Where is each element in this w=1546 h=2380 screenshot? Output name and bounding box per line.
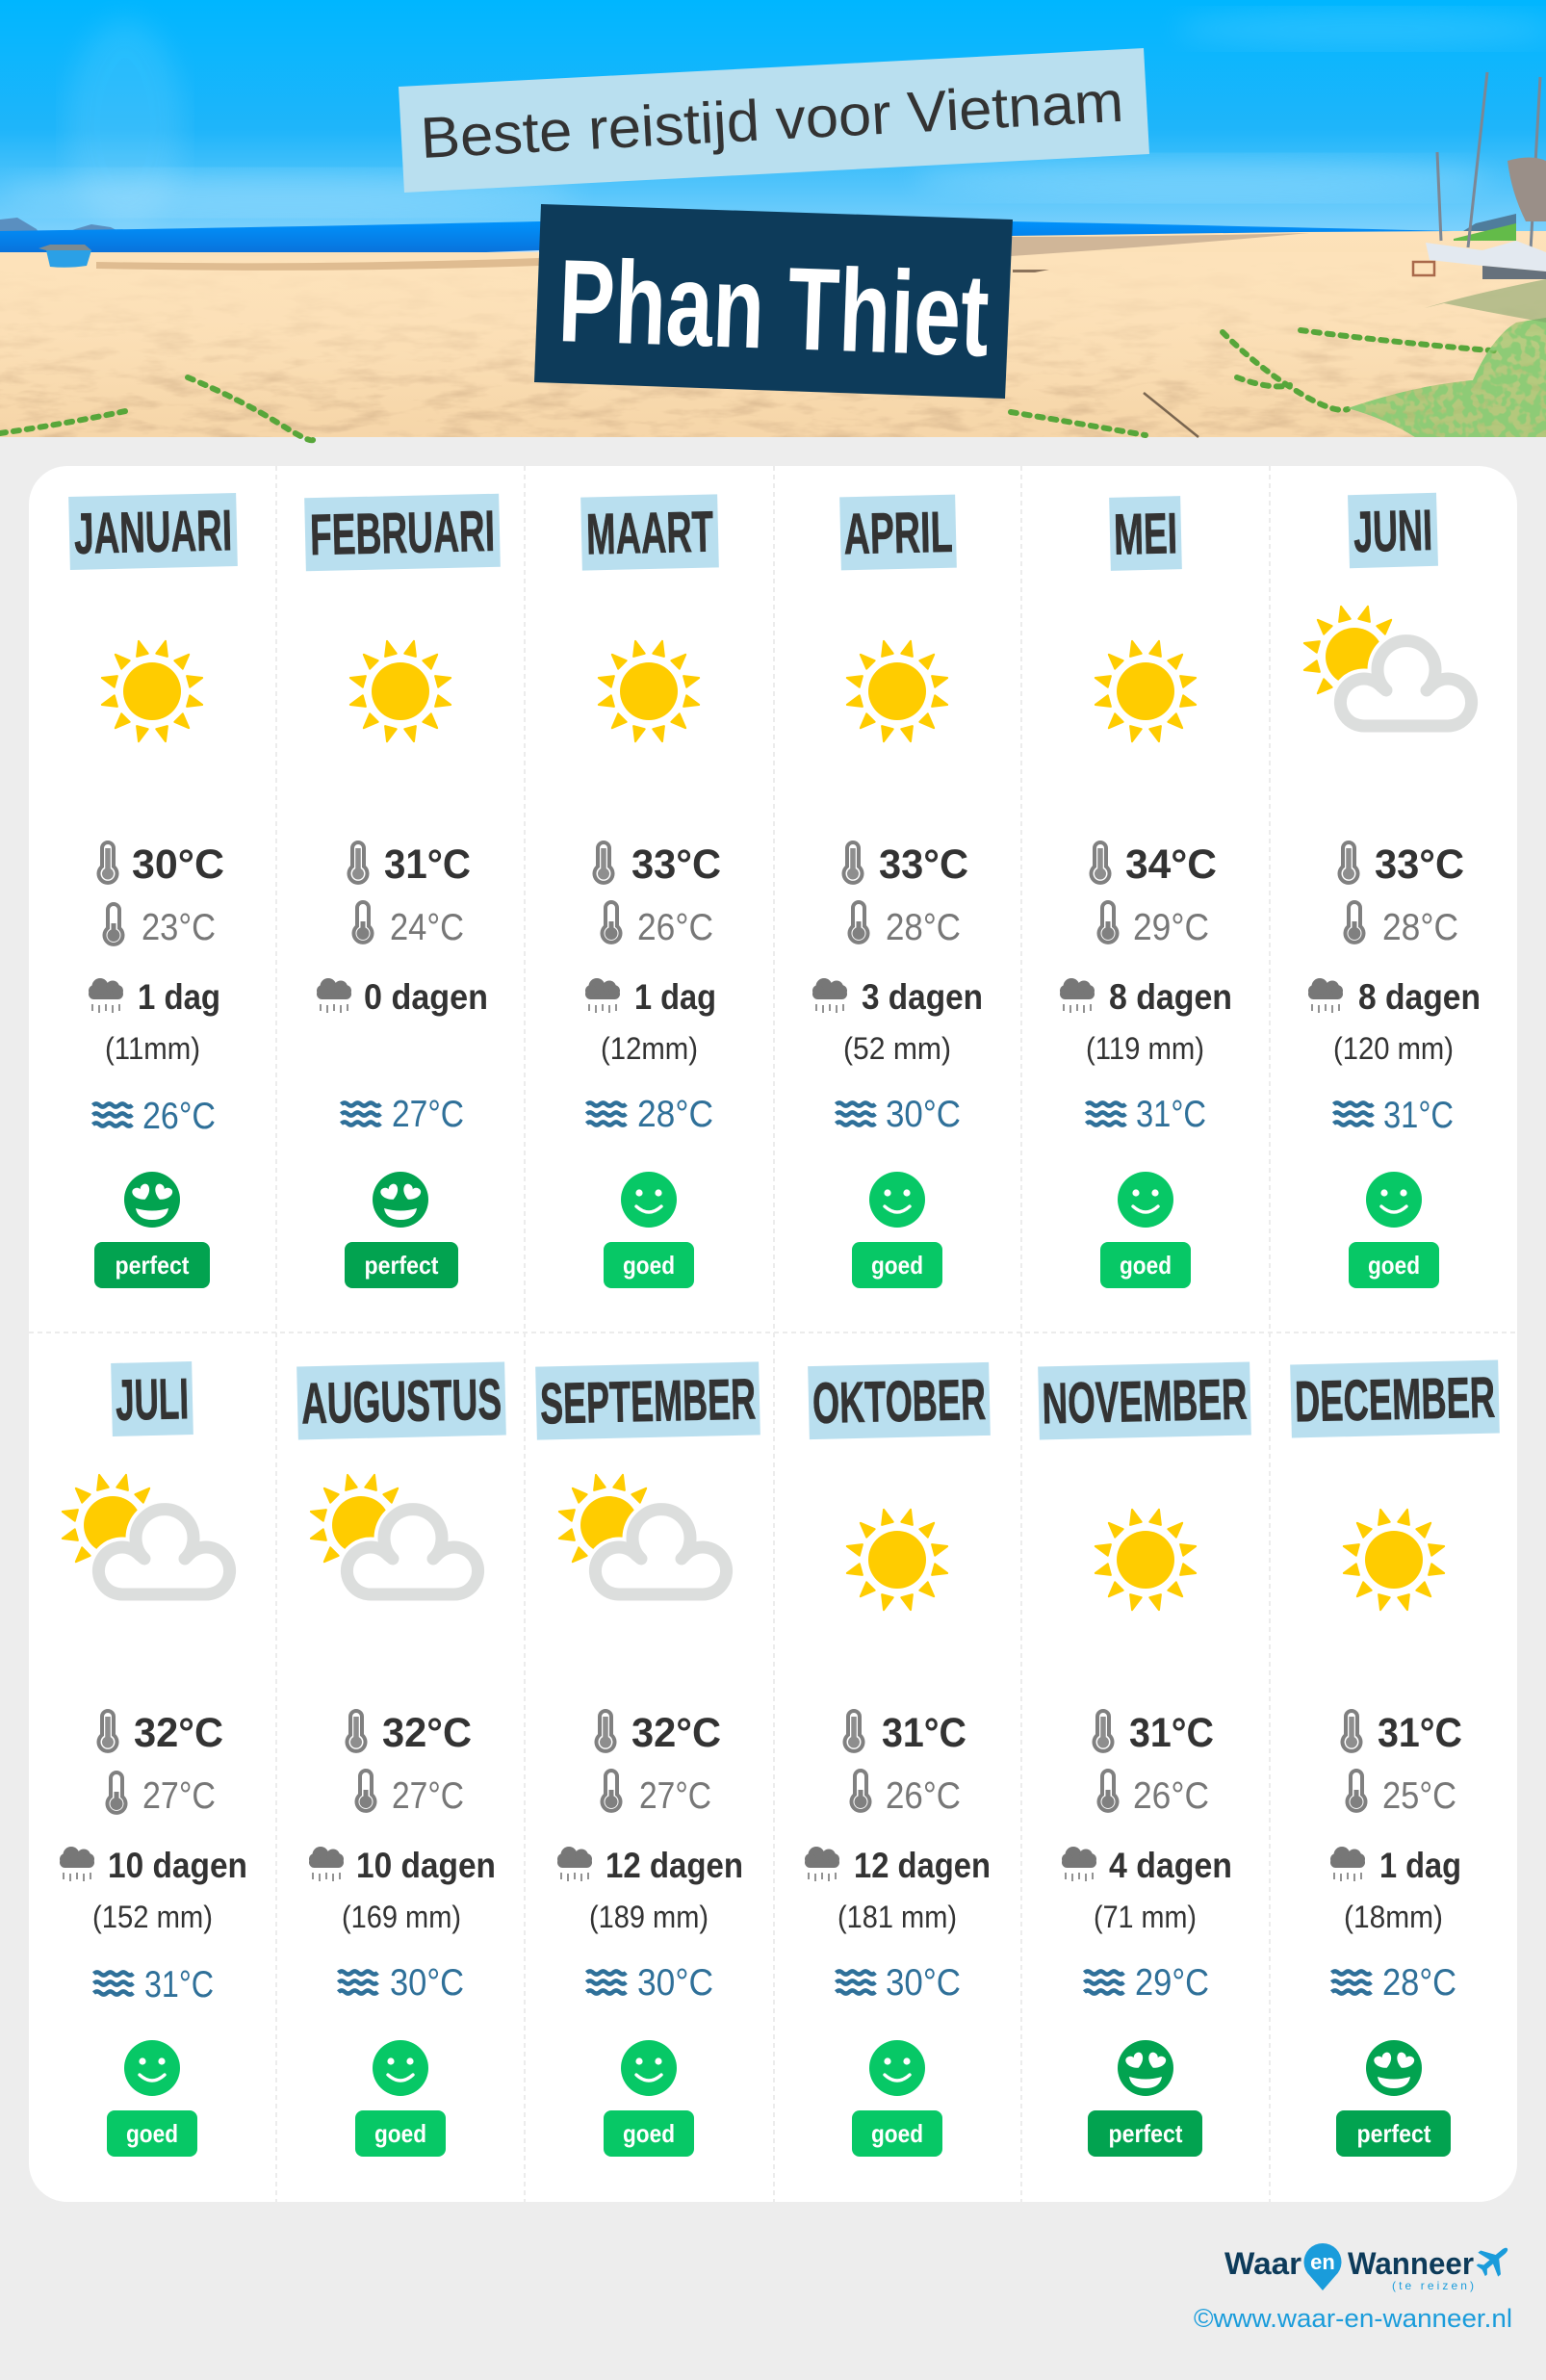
rating badge	[1336, 2110, 1451, 2157]
month: april	[812, 495, 983, 1288]
heading	[808, 1362, 991, 1439]
icon: sun	[100, 639, 204, 743]
icon: smiley goed	[124, 2040, 180, 2096]
min temperature: 28°C	[886, 907, 961, 948]
rain days: 0 dagen	[364, 977, 488, 1017]
min temperature: 27°C	[142, 1775, 216, 1817]
rain days: 1 dag	[634, 977, 716, 1017]
icon: smiley perfect	[1366, 2040, 1422, 2096]
rainfall: (152 mm)	[92, 1900, 213, 1934]
icon: waves	[341, 1102, 380, 1125]
rain days: 12 dagen	[854, 1846, 991, 1885]
rating badge	[1349, 1242, 1439, 1288]
heading: JANUARI	[73, 498, 233, 566]
min temperature: 28°C	[1382, 907, 1458, 948]
icon: thermometer min	[356, 1771, 375, 1811]
icon: sun behind cloud	[557, 1473, 727, 1594]
min temperature: 27°C	[639, 1775, 711, 1817]
month: maart	[580, 494, 721, 1288]
month: oktober	[805, 1362, 991, 2157]
month: juni	[1302, 493, 1481, 1288]
heading	[580, 494, 719, 571]
icon: thermometer min	[603, 1771, 620, 1811]
heading	[839, 495, 957, 570]
rain days: 4 dagen	[1109, 1846, 1232, 1885]
rating badge	[1100, 1242, 1191, 1288]
icon: thermometer min	[849, 902, 868, 943]
icon: thermometer max	[595, 842, 612, 883]
rain days: 3 dagen	[862, 977, 983, 1017]
sea temperature: 26°C	[142, 1096, 216, 1137]
heading: JUNI	[1353, 498, 1433, 564]
heading	[1109, 496, 1182, 571]
heading: NOVEMBER	[1042, 1367, 1248, 1436]
heading: JULI	[115, 1366, 190, 1433]
icon: thermometer min	[104, 904, 123, 944]
rating badge	[604, 2110, 694, 2157]
sea temperature: 30°C	[886, 1962, 961, 2004]
icon: rain	[585, 978, 620, 1013]
logo: Waar en Wanneer: Waar	[1224, 2246, 1301, 2281]
icon: rain	[1060, 978, 1095, 1013]
rating badge: perfect	[1357, 2119, 1431, 2148]
heading	[535, 1361, 760, 1440]
rating badge: goed	[623, 2119, 675, 2148]
icon: smiley goed	[869, 1172, 925, 1228]
rating badge: perfect	[116, 1251, 190, 1280]
icon: waves	[836, 1971, 875, 1994]
rainfall: (120 mm)	[1333, 1031, 1454, 1066]
heading	[68, 493, 238, 570]
rain days: 10 dagen	[356, 1846, 496, 1885]
month: mei	[1060, 496, 1232, 1288]
boat on the left	[39, 245, 91, 268]
icon: smiley goed	[373, 2040, 428, 2096]
max temperature: 31°C	[1129, 1710, 1214, 1756]
subtitle banner: Beste reistijd voor Vietnam	[419, 69, 1125, 170]
sea temperature: 30°C	[886, 1094, 961, 1135]
icon: thermometer min	[1346, 902, 1363, 943]
logo: Waar en Wanneer	[1224, 2237, 1517, 2292]
heading	[1348, 493, 1438, 568]
icon: smiley goed	[621, 1172, 677, 1228]
rain days: 12 dagen	[606, 1846, 743, 1885]
month: november	[1038, 1362, 1251, 2157]
max temperature: 31°C	[384, 841, 471, 888]
rating badge: perfect	[364, 1251, 439, 1280]
heading	[1038, 1362, 1251, 1439]
sea temperature: 30°C	[390, 1962, 464, 2004]
heading: MAART	[585, 500, 714, 566]
icon: sun behind cloud	[1302, 605, 1472, 726]
rating badge: goed	[1120, 1251, 1172, 1280]
rating badge: goed	[126, 2119, 178, 2148]
icon: rain	[812, 978, 847, 1013]
icon: map pin	[1303, 2243, 1342, 2290]
rain days: 10 dagen	[108, 1846, 247, 1885]
title banner: Phan Thiet	[556, 235, 992, 381]
icon: thermometer min	[851, 1771, 870, 1811]
icon: smiley goed	[1118, 1172, 1173, 1228]
rating badge	[107, 2110, 197, 2157]
month: juli	[60, 1361, 247, 2157]
rainfall: (181 mm)	[837, 1900, 957, 1934]
heading	[296, 1362, 506, 1439]
min temperature: 29°C	[1133, 907, 1209, 948]
min temperature: 27°C	[392, 1775, 464, 1817]
heading: AUGUSTUS	[300, 1367, 502, 1436]
icon: waves	[1084, 1971, 1123, 1994]
icon: sun	[1094, 639, 1198, 743]
sea temperature: 30°C	[637, 1962, 713, 2004]
heading: SEPTEMBER	[539, 1366, 757, 1436]
logo: Waar en Wanneer: (te reizen)	[1392, 2279, 1474, 2292]
icon: thermometer max	[98, 1711, 117, 1751]
min temperature: 23°C	[142, 907, 216, 948]
month: augustus	[296, 1362, 506, 2157]
subtitle banner	[399, 48, 1149, 193]
sea temperature: 31°C	[144, 1964, 214, 2005]
icon: sun	[845, 1508, 949, 1612]
icon: waves	[587, 1971, 626, 1994]
rating badge	[852, 2110, 942, 2157]
max temperature: 30°C	[132, 841, 224, 888]
icon: smiley goed	[621, 2040, 677, 2096]
max temperature: 33°C	[1375, 841, 1464, 888]
min temperature: 26°C	[1133, 1775, 1209, 1817]
icon: thermometer max	[98, 842, 117, 883]
icon: sun	[348, 639, 452, 743]
sea temperature: 31°C	[1383, 1095, 1454, 1136]
month: september	[535, 1361, 760, 2157]
rain days: 1 dag	[138, 977, 220, 1017]
heading: APRIL	[843, 500, 953, 566]
icon: rain	[60, 1847, 94, 1881]
min temperature: 25°C	[1382, 1775, 1456, 1817]
icon: sun	[845, 639, 949, 743]
icon: waves	[1086, 1102, 1125, 1125]
sea temperature: 28°C	[637, 1094, 713, 1135]
logo: Waar en Wanneer: Wanneer	[1348, 2246, 1474, 2281]
rainfall: (169 mm)	[342, 1900, 461, 1934]
rainfall: (12mm)	[601, 1031, 698, 1066]
sea temperature: 29°C	[1135, 1962, 1209, 2004]
icon: thermometer max	[348, 842, 368, 883]
icon: waves	[92, 1103, 132, 1126]
icon: thermometer min	[603, 902, 620, 943]
title banner	[534, 204, 1013, 399]
heading: OKTOBER	[812, 1367, 987, 1436]
sea temperature: 31°C	[1136, 1094, 1206, 1135]
icon: thermometer max	[347, 1711, 366, 1751]
icon: waves	[339, 1971, 377, 1994]
max temperature: 32°C	[382, 1710, 472, 1756]
rating badge	[94, 1242, 210, 1288]
panel: monthly climate table	[29, 466, 1517, 2202]
rating badge: goed	[1368, 1251, 1420, 1280]
rating badge	[852, 1242, 942, 1288]
icon: map pin: en	[1310, 2250, 1335, 2274]
rainfall: (189 mm)	[589, 1900, 709, 1934]
hero beach photo	[0, 0, 1546, 440]
icon: sun	[1094, 1508, 1198, 1612]
icon: rain	[317, 978, 351, 1013]
icon: thermometer max	[1092, 842, 1109, 883]
icon: sun	[1342, 1508, 1446, 1612]
icon: rain	[89, 978, 123, 1013]
icon: smiley goed	[869, 2040, 925, 2096]
icon: waves	[94, 1972, 133, 1995]
icon: thermometer min	[1099, 1771, 1117, 1811]
max temperature: 32°C	[134, 1710, 223, 1756]
icon: thermometer min	[1348, 1771, 1365, 1811]
min temperature: 24°C	[390, 907, 464, 948]
icon: rain	[1308, 978, 1343, 1013]
heading	[111, 1361, 193, 1436]
month: december	[1290, 1360, 1500, 2157]
rating badge	[604, 1242, 694, 1288]
icon: smiley perfect	[124, 1172, 180, 1228]
icon: smiley perfect	[1118, 2040, 1173, 2096]
rainfall: (119 mm)	[1086, 1031, 1204, 1066]
rainfall: (71 mm)	[1094, 1900, 1197, 1934]
icon: rain	[805, 1847, 839, 1881]
icon: rain	[557, 1847, 592, 1881]
rain days: 8 dagen	[1358, 977, 1481, 1017]
icon: sun behind cloud	[309, 1473, 478, 1594]
rating badge	[345, 1242, 458, 1288]
rating badge: goed	[871, 2119, 923, 2148]
icon: waves	[587, 1102, 626, 1125]
icon: thermometer max	[843, 842, 863, 883]
rating badge	[355, 2110, 446, 2157]
icon: thermometer max	[1342, 1711, 1361, 1751]
max temperature: 31°C	[882, 1710, 966, 1756]
max temperature: 33°C	[631, 841, 721, 888]
icon: thermometer min	[1099, 902, 1117, 943]
rating badge: goed	[871, 1251, 923, 1280]
max temperature: 32°C	[631, 1710, 721, 1756]
icon: waves	[1332, 1971, 1371, 1994]
max temperature: 34°C	[1125, 841, 1217, 888]
sea temperature: 27°C	[392, 1094, 464, 1135]
rainfall: (11mm)	[105, 1031, 200, 1066]
icon: rain	[1330, 1847, 1365, 1881]
icon: smiley goed	[1366, 1172, 1422, 1228]
rating badge: perfect	[1109, 2119, 1183, 2148]
rainfall: (52 mm)	[843, 1031, 951, 1066]
month: februari	[304, 494, 501, 1288]
month: januari	[68, 493, 238, 1288]
icon: thermometer min	[108, 1772, 125, 1813]
max temperature: 33°C	[879, 841, 968, 888]
boats on the right	[1413, 72, 1546, 279]
icon: thermometer min	[354, 902, 372, 943]
icon: waves	[836, 1102, 875, 1125]
icon: sun	[597, 639, 701, 743]
rainfall: (18mm)	[1344, 1900, 1443, 1934]
website url: ©www.waar-en-wanneer.nl	[1194, 2304, 1512, 2333]
heading	[304, 494, 501, 571]
min temperature: 26°C	[637, 907, 713, 948]
max temperature: 31°C	[1378, 1710, 1462, 1756]
rating badge: goed	[374, 2119, 426, 2148]
rain days: 1 dag	[1379, 1846, 1461, 1885]
rating badge	[1088, 2110, 1202, 2157]
rain days: 8 dagen	[1109, 977, 1232, 1017]
rating badge: goed	[623, 1251, 675, 1280]
icon: thermometer max	[597, 1711, 614, 1751]
icon: rain	[309, 1847, 344, 1881]
icon: smiley perfect	[373, 1172, 428, 1228]
icon: thermometer max	[1340, 842, 1357, 883]
min temperature: 26°C	[886, 1775, 961, 1817]
icon: thermometer max	[845, 1711, 863, 1751]
icon: thermometer max	[1094, 1711, 1113, 1751]
sea temperature: 28°C	[1382, 1962, 1456, 2004]
heading: MEI	[1113, 501, 1178, 567]
icon: rain	[1062, 1847, 1096, 1881]
icon: sun behind cloud	[61, 1473, 230, 1594]
icon: waves	[1334, 1102, 1373, 1125]
heading: FEBRUARI	[309, 499, 496, 567]
icon: airplane	[1471, 2237, 1517, 2283]
